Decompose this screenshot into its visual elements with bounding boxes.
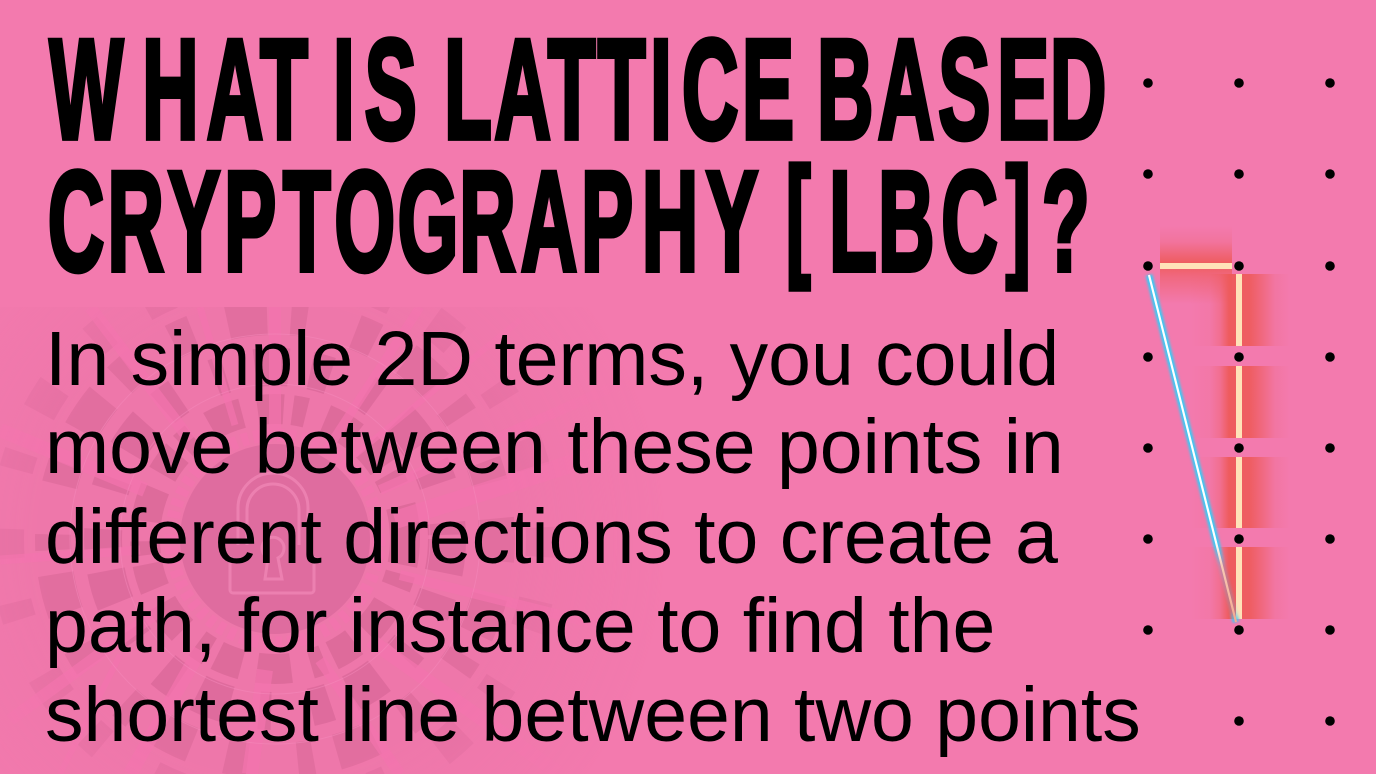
long path: neon red stepped route — [1160, 226, 1290, 619]
title: LBC — [829, 143, 998, 301]
title — [48, 11, 1106, 301]
title: [ — [786, 140, 810, 290]
small light dashes ring — [171, 435, 379, 643]
body text — [45, 316, 1141, 758]
body text: shortest line between two points — [45, 672, 1141, 758]
title: ] — [1006, 140, 1030, 290]
body text: different directions to create a — [45, 494, 1058, 580]
title: CRYPTOGRAPHY — [48, 143, 758, 301]
short path: neon blue diagonal line — [1149, 275, 1236, 622]
title: WHAT — [50, 11, 308, 169]
light rays — [14, 335, 528, 774]
title: ? — [1042, 143, 1090, 301]
icon: padlock — [230, 473, 314, 593]
body text: path, for instance to find the — [45, 583, 995, 669]
body text: In simple 2D terms, you could — [45, 316, 1059, 402]
background image: radial digital lock — [0, 307, 560, 774]
thin rings — [70, 334, 480, 744]
body text: move between these points in — [45, 404, 1064, 490]
central disc — [180, 444, 370, 634]
title: LATTICE — [444, 11, 794, 169]
title: IS — [333, 11, 417, 169]
lattice dot grid — [1143, 78, 1335, 726]
title: BASED — [817, 11, 1106, 169]
